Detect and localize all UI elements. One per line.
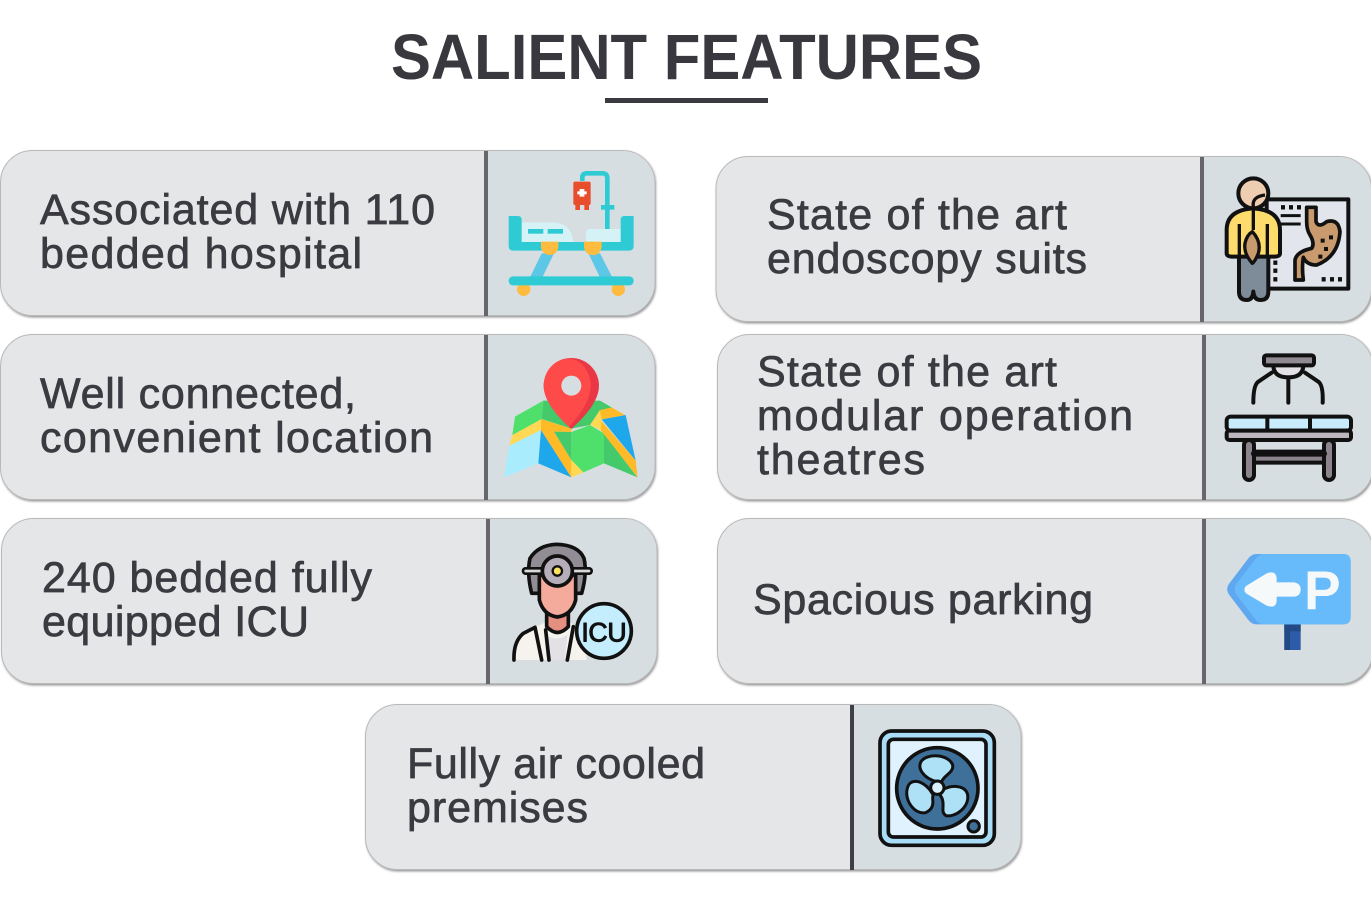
panel: ICU <box>2 518 656 684</box>
icon label: ICU: ICU <box>581 617 627 647</box>
panel: operation theatres <box>718 334 1371 500</box>
icon backing <box>488 335 654 499</box>
icon: doctor with ICU badge <box>514 544 631 660</box>
icon backing <box>1206 519 1371 683</box>
icon: map with pin <box>504 358 638 477</box>
icon: operating table and lamp <box>1227 355 1351 480</box>
icon: hospital bed <box>509 173 634 296</box>
feature text: State of the art <box>767 191 1067 239</box>
icon backing <box>488 151 654 315</box>
icon: parking sign <box>1227 554 1351 650</box>
feature text: bedded hospital <box>40 230 362 278</box>
feature text: Spacious parking <box>753 576 1093 624</box>
feature text: premises <box>407 784 588 832</box>
feature text: 240 bedded fully <box>42 554 372 602</box>
panel background <box>0 334 654 500</box>
panel: location <box>0 334 654 500</box>
icon: endoscopy chart and patient <box>1227 178 1348 300</box>
feature text: Fully air cooled <box>407 740 705 788</box>
panel: 110 bedded hospital <box>0 150 654 316</box>
panel background <box>718 518 1371 684</box>
icon: ventilation fan <box>880 731 994 845</box>
feature text: Well connected, <box>40 370 356 418</box>
feature text: State of the art <box>757 348 1057 396</box>
icon backing <box>490 519 656 683</box>
title: SALIENT FEATURES <box>391 21 982 93</box>
icon label: P: P <box>1304 560 1341 622</box>
feature text: convenient location <box>40 414 433 462</box>
panel background <box>718 334 1371 500</box>
panel background <box>716 156 1371 322</box>
feature text: endoscopy suits <box>767 235 1087 283</box>
panel: endoscopy <box>716 156 1371 322</box>
title underline <box>605 98 768 103</box>
panel background <box>0 150 654 316</box>
panel background <box>2 518 656 684</box>
icon backing <box>1206 335 1371 499</box>
panel: air cooled <box>366 704 1020 870</box>
feature text: Associated with 110 <box>40 186 435 234</box>
feature text: equipped ICU <box>42 598 309 646</box>
feature text: theatres <box>757 436 925 484</box>
icon backing <box>1204 157 1371 321</box>
feature text: modular operation <box>757 392 1133 440</box>
panel background <box>366 704 1020 870</box>
panel: parking <box>718 518 1371 684</box>
icon backing <box>854 705 1020 869</box>
